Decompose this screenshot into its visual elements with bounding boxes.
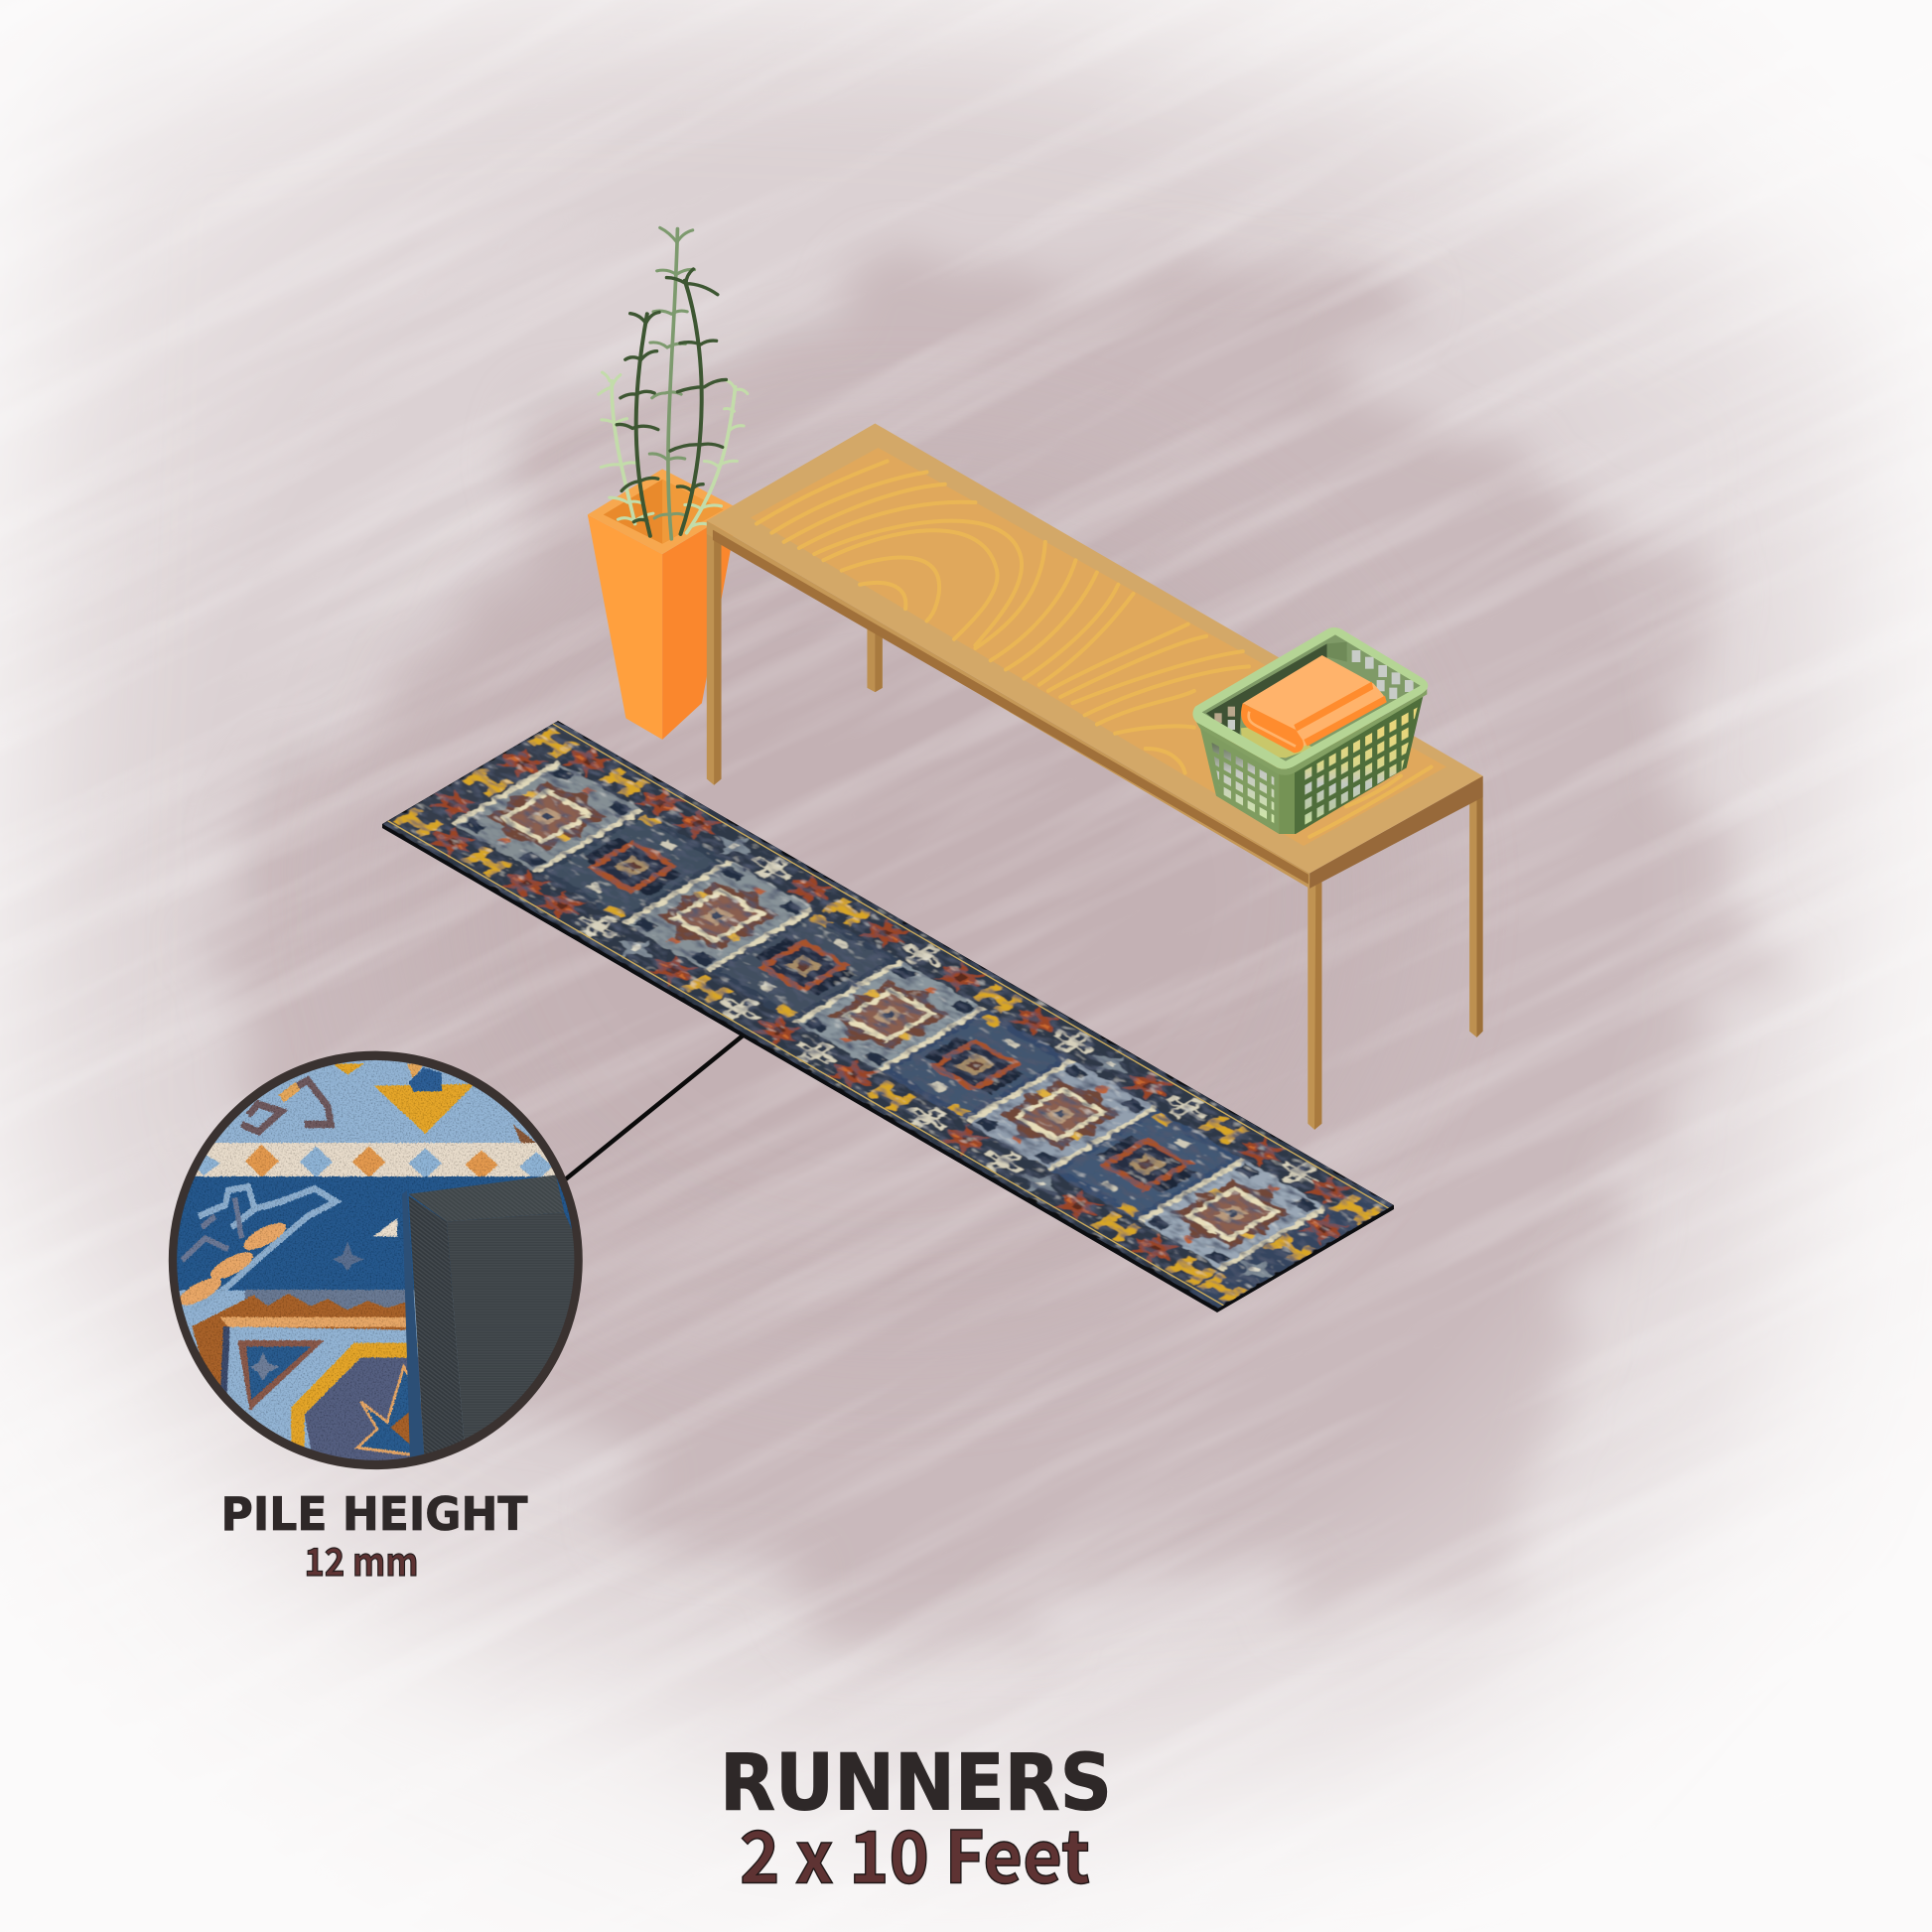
field panels xyxy=(451,760,642,873)
label: 12 mm: 12 mm xyxy=(304,1532,419,1587)
table: top surface xyxy=(707,424,1483,874)
basket rim xyxy=(1192,627,1428,769)
basket right face xyxy=(1279,697,1423,834)
basket interior xyxy=(1196,630,1425,766)
potted plant and table drawn in zoom coordinates xyxy=(588,227,1483,1130)
front border motifs xyxy=(419,822,485,861)
table: front leg xyxy=(1308,880,1321,1130)
basket left face xyxy=(1198,722,1279,834)
icon: green laundry basket with towels xyxy=(1172,616,1449,854)
label: pile height: PILE HEIGHT xyxy=(220,1487,528,1541)
end borders xyxy=(494,745,542,782)
callout: magnified rug corner xyxy=(169,1033,586,1488)
gold piping lines xyxy=(552,724,1389,1208)
magnifier ring xyxy=(173,1055,579,1464)
table: right leg xyxy=(1469,776,1483,1037)
magnified rug face xyxy=(169,1033,586,1488)
table: edges xyxy=(707,520,1483,889)
callout connector line xyxy=(563,1033,747,1181)
rug: runner in isometric view xyxy=(382,721,1397,1312)
back border motifs xyxy=(556,742,622,780)
folded towels xyxy=(1241,655,1387,758)
table: back leg xyxy=(867,624,883,692)
icon: plant stems and leaves xyxy=(599,227,748,539)
folded rug backing flap xyxy=(402,1175,586,1473)
rug edge thickness xyxy=(382,721,1394,1312)
subtitle: size: 2 x 10 Feet xyxy=(740,1799,1090,1904)
rug woven pattern xyxy=(382,721,1397,1311)
table: wood grain xyxy=(757,461,1432,837)
table: left leg xyxy=(707,527,722,785)
icon: orange planter xyxy=(588,469,739,740)
title: runners: RUNNERS xyxy=(720,1739,1112,1829)
